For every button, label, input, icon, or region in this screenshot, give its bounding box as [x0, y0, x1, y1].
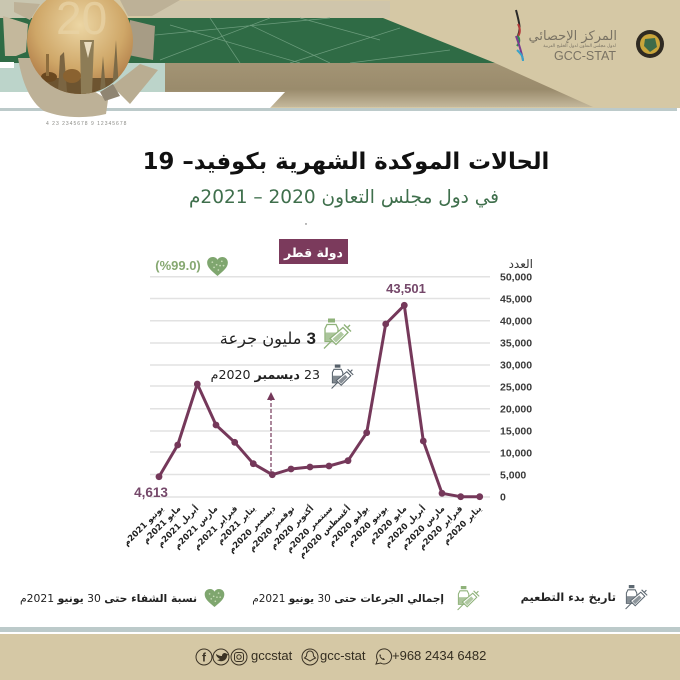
x axis labels: فبراير 2021م [192, 503, 240, 552]
footer: gcc-stat [320, 648, 366, 663]
grid lines [150, 277, 490, 497]
icon: instagram [231, 649, 247, 665]
GCC-Stat logo: لدول مجلس التعاون لدول الخليج العربية [543, 44, 616, 49]
icon: green heart [207, 257, 228, 276]
x axis labels: أبريل 2021م [154, 503, 201, 549]
y axis labels: 5,000 [500, 470, 526, 482]
skyline [41, 2, 118, 94]
GCC-Stat logo: GCC-STAT [554, 49, 616, 63]
small dot [305, 223, 307, 225]
subtitle: في دول مجلس التعاون 2020 – 2021م [189, 187, 499, 208]
x axis labels: يونيو 2020م [345, 503, 390, 548]
legend: total doses: إجمالي الجرعات حتى 30 يونيو 2021م [252, 593, 444, 605]
x axis labels: يوليو 2020م [326, 503, 371, 548]
icon: dark vaccine legend [626, 585, 647, 609]
y axis labels: 20,000 [500, 404, 532, 416]
x axis labels: مايو 2021م [141, 503, 183, 546]
x axis labels: فبراير 2020م [417, 503, 465, 552]
icon: facebook [196, 649, 212, 665]
y axis labels: 35,000 [500, 338, 532, 350]
x axis labels: سبتمبر 2020م [284, 503, 335, 555]
total doses callout [220, 318, 351, 349]
icon: green vaccine legend [458, 586, 479, 610]
ruler text: 4 23 2345678 9 12345678 [46, 121, 127, 127]
icon: heart legend [205, 589, 224, 607]
legend [20, 585, 647, 610]
legend: recovery rate: نسبة الشفاء حتى 30 يونيو 2021م [20, 592, 197, 605]
GCC emblem [636, 30, 664, 58]
y axis labels: 10,000 [500, 448, 532, 460]
peak value: 43,501 [386, 281, 426, 296]
icon: twitter [213, 649, 229, 665]
x axis labels: ديسمبر 2020م [226, 503, 279, 555]
y axis labels: 50,000 [500, 272, 532, 284]
y axis labels: 30,000 [500, 360, 532, 372]
x axis labels [121, 503, 484, 560]
vaccination start callout [211, 364, 353, 388]
x axis labels: يناير 2020م [441, 503, 484, 547]
data line [159, 305, 480, 497]
icon: facebook: f [202, 650, 207, 664]
line chart [121, 257, 533, 560]
x axis labels: نوفمبر 2020م [247, 503, 297, 554]
phone: +968 2434 6482 [392, 648, 486, 663]
GCC-Stat logo [516, 10, 617, 63]
social icons [196, 649, 392, 665]
header banner [0, 0, 680, 127]
footer [0, 627, 680, 680]
y axis title: العدد [509, 257, 533, 271]
total doses callout: 3 مليون جرعة [220, 329, 316, 349]
x axis labels: أكتوبر 2020م [267, 503, 316, 552]
x axis labels: أغسطس 2020م [296, 503, 353, 560]
y axis labels [500, 272, 532, 504]
legend: start date: تاريخ بدء التطعيم [521, 591, 616, 604]
icon: green vaccine [324, 318, 351, 348]
data points [156, 302, 483, 500]
tan band [165, 63, 593, 107]
legend: recovery rate [20, 589, 224, 607]
x axis labels: أبريل 2020م [381, 503, 428, 549]
legend: total doses [252, 586, 479, 610]
title: الحالات الموكدة الشهرية بكوفيد– 19 [143, 149, 549, 175]
legend: start date [521, 585, 647, 609]
y axis labels: 25,000 [500, 382, 532, 394]
x axis labels: يونيو 2021م [121, 503, 166, 548]
y axis labels: 15,000 [500, 426, 532, 438]
social handles: gccstat [251, 648, 293, 663]
country tag: دولة قطر [283, 245, 343, 260]
icon: snapchat [302, 649, 318, 665]
gear emblem [3, 0, 180, 117]
vaccination start arrow [267, 392, 275, 473]
x axis labels: مايو 2020م [367, 503, 409, 546]
icon: whatsapp [376, 649, 392, 664]
green ribbon [0, 18, 495, 63]
x axis labels: يناير 2021م [215, 503, 258, 547]
GCC-Stat logo: المركز الإحصائي [528, 29, 617, 44]
y axis labels: 0 [500, 492, 506, 504]
x axis labels: مارس 2021م [172, 503, 220, 551]
country tag [279, 239, 348, 264]
icon: dark vaccine [332, 364, 353, 388]
y axis labels: 40,000 [500, 316, 532, 328]
y axis labels: 45,000 [500, 294, 532, 306]
vaccination start callout: 23 ديسمبر 2020م [211, 367, 320, 382]
x axis labels: مارس 2020م [399, 503, 447, 551]
last value: 4,613 [134, 485, 168, 500]
recovery rate callout: (%99.0) [155, 258, 201, 273]
recovery rate callout [155, 257, 228, 276]
